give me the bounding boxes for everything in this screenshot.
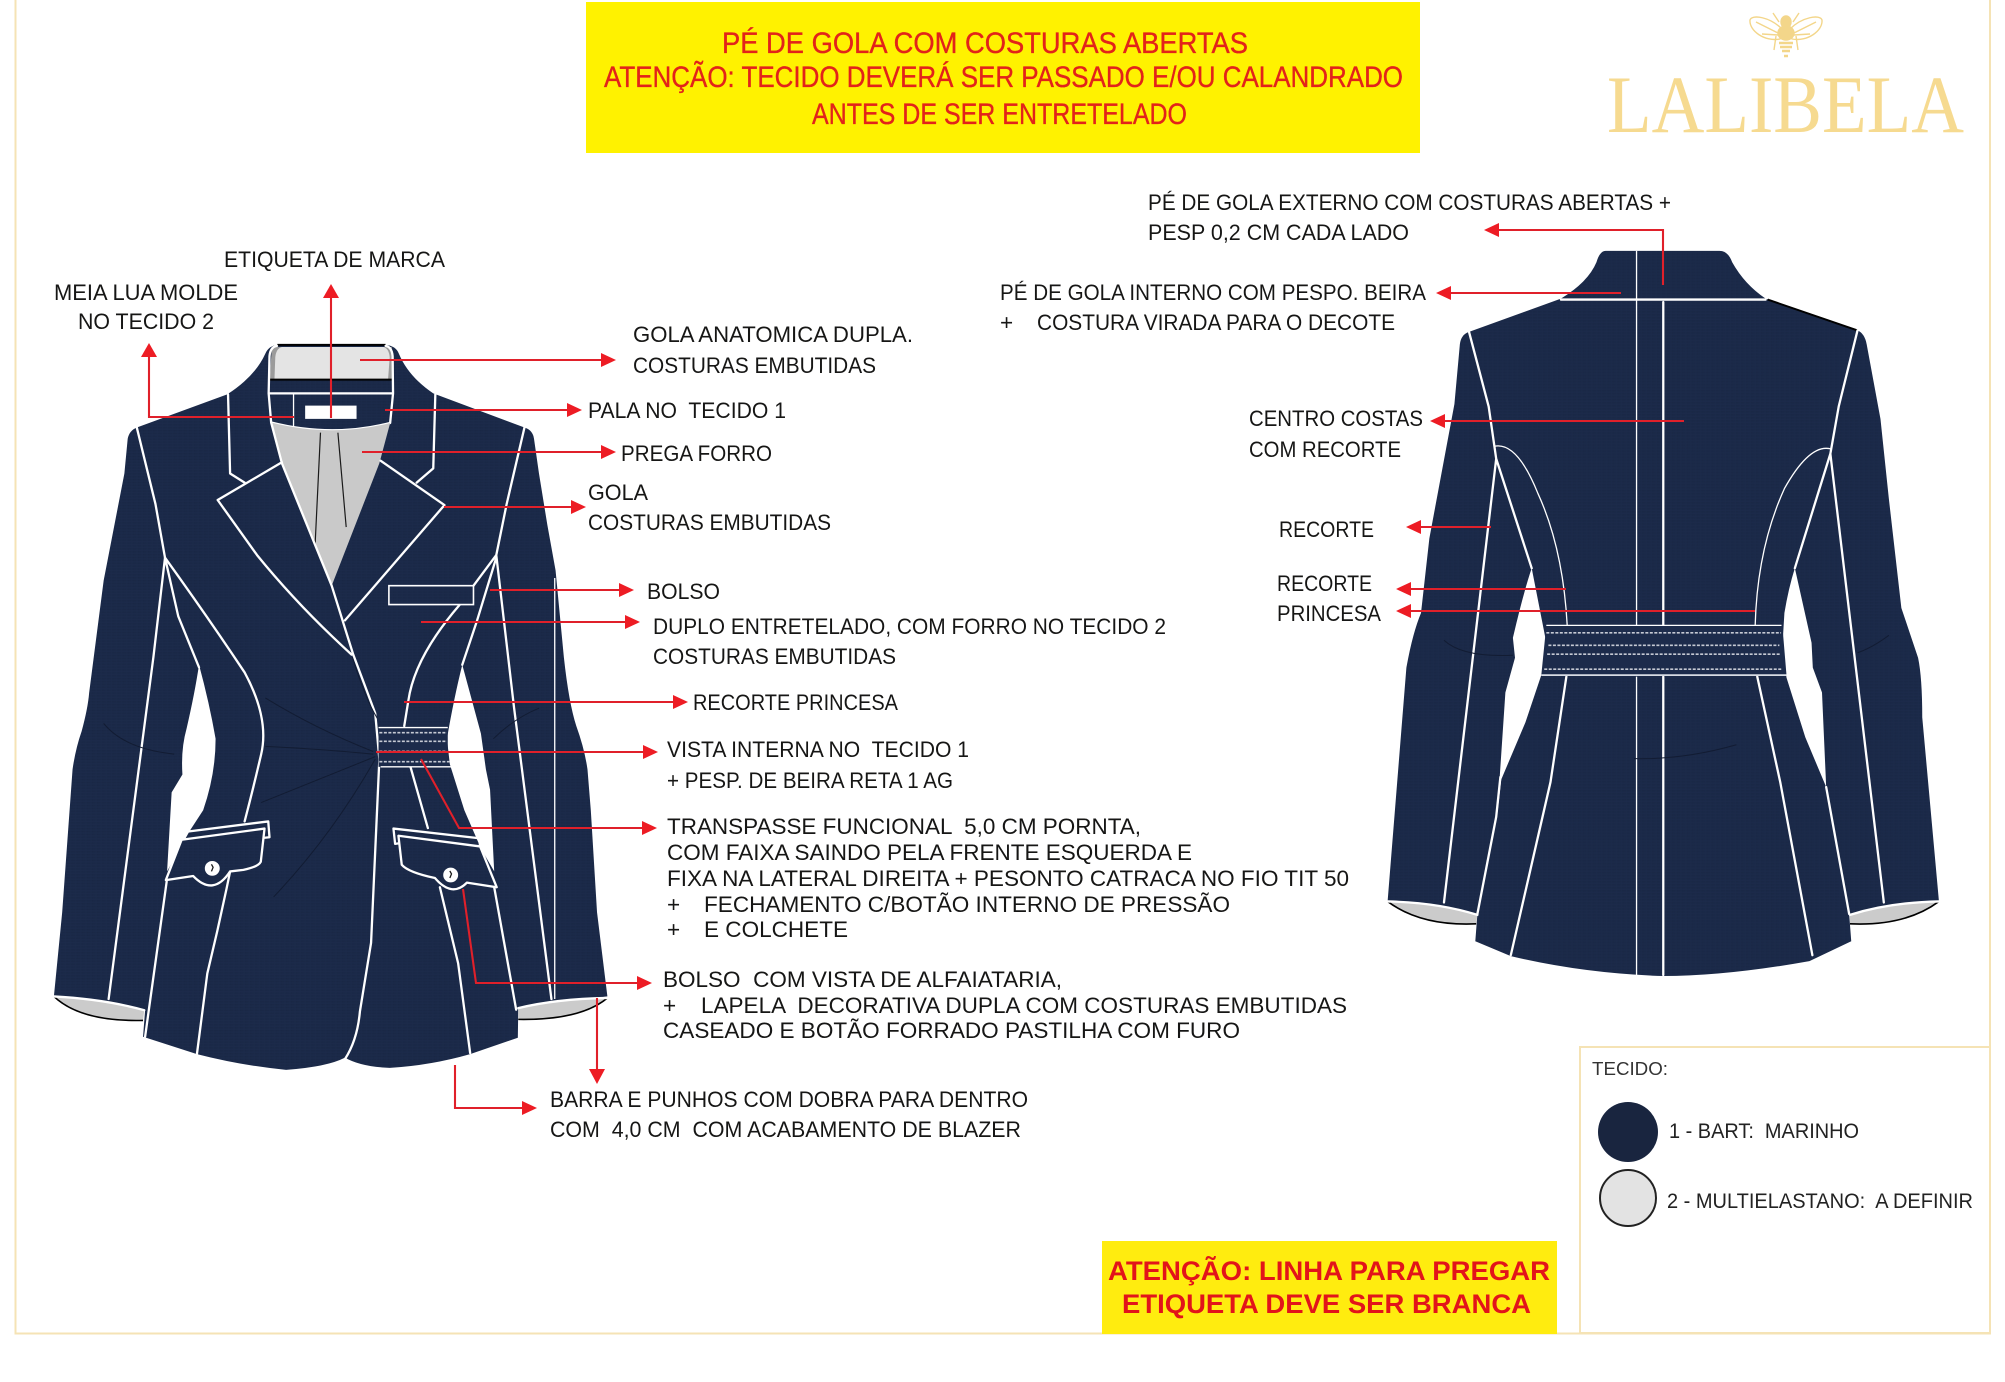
arrow: welt pocket bbox=[463, 889, 652, 990]
legend text 2: 2 - MULTIELASTANO: A DEFINIR bbox=[1667, 1190, 1973, 1213]
neck band bbox=[269, 381, 393, 431]
lining bbox=[271, 422, 390, 586]
icon: button bbox=[443, 868, 458, 882]
icon: bee bbox=[1750, 13, 1822, 56]
label: overlap: + bbox=[667, 892, 680, 917]
label: overlap: FIXA NA LATERAL DIREITA + PESONTO CATRACA NO FIO TIT 50 bbox=[667, 866, 1349, 891]
arrow: hem bbox=[455, 1065, 537, 1115]
warning callout bbox=[1102, 1241, 1557, 1334]
label: back princess seam: PRINCESA bbox=[1277, 601, 1381, 626]
left pocket flap bbox=[166, 821, 269, 885]
label: back princess seam bbox=[1277, 571, 1381, 626]
arrow: princess back left bbox=[1396, 582, 1566, 596]
seams bbox=[1444, 330, 1884, 902]
label: double interfacing bbox=[653, 614, 1166, 669]
label: inner facing bbox=[667, 737, 969, 793]
label: half moon bbox=[54, 280, 238, 334]
wrinkles bbox=[104, 657, 539, 897]
arrow: center back bbox=[1430, 414, 1684, 428]
swatch: light gray bbox=[1600, 1170, 1656, 1226]
label: internal collar stand bbox=[1000, 280, 1426, 335]
legend text 1: 1 - BART: MARINHO bbox=[1669, 1120, 1859, 1143]
logo bbox=[1607, 13, 1964, 150]
icon: button bbox=[205, 861, 220, 876]
label: double interfacing: COSTURAS EMBUTIDAS bbox=[653, 644, 896, 669]
logo: LALIBELA bbox=[1607, 59, 1964, 150]
jacket silhouette bbox=[54, 345, 607, 1070]
label: pocket: BOLSO bbox=[647, 579, 720, 604]
label: yoke: PALA NO TECIDO 1 bbox=[588, 398, 786, 423]
arrow: lapel bbox=[444, 500, 586, 514]
warning callout: ATENÇÃO: LINHA PARA PREGAR bbox=[1108, 1255, 1550, 1286]
panel: fabric legend bbox=[1580, 1047, 1990, 1333]
arrow: collar bbox=[360, 353, 616, 367]
belt bbox=[379, 728, 451, 767]
label: overlap: COM FAIXA SAINDO PELA FRENTE ESQUERDA E bbox=[667, 840, 1192, 865]
label: internal collar stand: PÉ DE GOLA INTERNO COM PESPO. BEIRA bbox=[1000, 280, 1426, 305]
arrow: back seam bbox=[1406, 520, 1491, 534]
label: internal collar stand: + bbox=[1000, 310, 1013, 335]
label: external collar stand: PESP 0,2 CM CADA LADO bbox=[1148, 220, 1409, 245]
label: tailored pocket: BOLSO COM VISTA DE ALFAIATARIA, bbox=[663, 967, 1062, 992]
label: center back: COM RECORTE bbox=[1249, 437, 1401, 462]
inner collar bbox=[269, 347, 393, 379]
front jacket illustration bbox=[54, 345, 607, 1070]
lapels bbox=[218, 422, 444, 1059]
label: inner facing: VISTA INTERNA NO TECIDO 1 bbox=[667, 737, 969, 762]
label: overlap: TRANSPASSE FUNCIONAL 5,0 CM PORNTA, bbox=[667, 814, 1141, 839]
label: lining pleat: PREGA FORRO bbox=[621, 441, 772, 466]
arrow: inner facing bbox=[376, 745, 658, 759]
arrow: internal collar stand bbox=[1436, 286, 1621, 300]
label: brand tag: ETIQUETA DE MARCA bbox=[224, 247, 445, 272]
label: anatomic collar: GOLA ANATOMICA DUPLA. bbox=[633, 322, 913, 347]
arrow: lining pleat bbox=[362, 445, 616, 459]
arrow: external collar stand bbox=[1484, 223, 1663, 285]
armhole gaps bbox=[167, 665, 216, 871]
title banner: ATENÇÃO: TECIDO DEVERÁ SER PASSADO E/OU CALANDRADO bbox=[604, 60, 1403, 94]
label: center back bbox=[1249, 406, 1423, 462]
title banner bbox=[586, 2, 1420, 153]
label: half moon: MEIA LUA MOLDE bbox=[54, 280, 238, 305]
swatch: navy bbox=[1598, 1102, 1658, 1162]
label: overlap: FECHAMENTO C/BOTÃO INTERNO DE PRESSÃO bbox=[704, 892, 1230, 917]
title banner: ANTES DE SER ENTRETELADO bbox=[812, 98, 1187, 131]
label: lapel: GOLA bbox=[588, 480, 648, 505]
label: back princess seam: RECORTE bbox=[1277, 571, 1372, 596]
arrow: princess seam bbox=[404, 695, 688, 709]
seams bbox=[137, 428, 263, 1054]
label: anatomic collar bbox=[633, 322, 913, 378]
label: tailored pocket: CASEADO E BOTÃO FORRADO PASTILHA COM FURO bbox=[663, 1018, 1240, 1043]
label: inner facing: + PESP. DE BEIRA RETA 1 AG bbox=[667, 768, 953, 793]
label: overlap: E COLCHETE bbox=[704, 917, 848, 942]
label: double interfacing: DUPLO ENTRETELADO, COM FORRO NO TECIDO 2 bbox=[653, 614, 1166, 639]
center seams bbox=[1636, 251, 1638, 975]
arrow: cuff bbox=[589, 998, 605, 1084]
arrow: overlap bbox=[421, 759, 657, 835]
cuffs bbox=[1388, 901, 1477, 924]
label: tailored pocket: + bbox=[663, 993, 676, 1018]
arrow: brand label bbox=[323, 284, 339, 418]
label: internal collar stand: COSTURA VIRADA PARA O DECOTE bbox=[1037, 310, 1395, 335]
label: overlap bbox=[667, 814, 1349, 942]
warning callout: ETIQUETA DEVE SER BRANCA bbox=[1122, 1289, 1531, 1319]
label: center back: CENTRO COSTAS bbox=[1249, 406, 1423, 431]
arrow: chest pocket bbox=[490, 583, 634, 597]
label: tailored pocket bbox=[663, 967, 1347, 1043]
label: external collar stand bbox=[1148, 190, 1671, 245]
label: princess seam: RECORTE PRINCESA bbox=[693, 690, 898, 715]
right pocket flap bbox=[393, 829, 497, 889]
label: lapel: COSTURAS EMBUTIDAS bbox=[588, 510, 831, 535]
label: anatomic collar: COSTURAS EMBUTIDAS bbox=[633, 353, 876, 378]
jacket silhouette bbox=[1388, 251, 1939, 976]
brand label bbox=[305, 406, 357, 419]
arrow: princess back right bbox=[1396, 604, 1755, 618]
label: lapel bbox=[588, 480, 831, 535]
arrow: yoke bbox=[385, 403, 582, 417]
label: external collar stand: PÉ DE GOLA EXTERNO COM COSTURAS ABERTAS + bbox=[1148, 190, 1671, 215]
label: back seam: RECORTE bbox=[1279, 517, 1374, 542]
title banner: PÉ DE GOLA COM COSTURAS ABERTAS bbox=[722, 27, 1248, 60]
armhole gaps bbox=[1497, 568, 1546, 817]
cuffs bbox=[54, 996, 144, 1020]
arrow: half moon bbox=[141, 343, 294, 417]
legend heading: TECIDO: bbox=[1592, 1059, 1668, 1079]
chest pocket bbox=[389, 586, 473, 605]
label: half moon: NO TECIDO 2 bbox=[78, 309, 214, 334]
belt bbox=[1541, 625, 1786, 675]
label: hem and cuffs bbox=[550, 1087, 1028, 1142]
arrow: double interfacing bbox=[421, 615, 640, 629]
label: tailored pocket: LAPELA DECORATIVA DUPLA COM COSTURAS EMBUTIDAS bbox=[701, 993, 1347, 1018]
back jacket illustration bbox=[1388, 251, 1939, 976]
label: hem and cuffs: COM 4,0 CM COM ACABAMENTO DE BLAZER bbox=[550, 1117, 1021, 1142]
label: hem and cuffs: BARRA E PUNHOS COM DOBRA PARA DENTRO bbox=[550, 1087, 1028, 1112]
label: overlap: + bbox=[667, 917, 680, 942]
